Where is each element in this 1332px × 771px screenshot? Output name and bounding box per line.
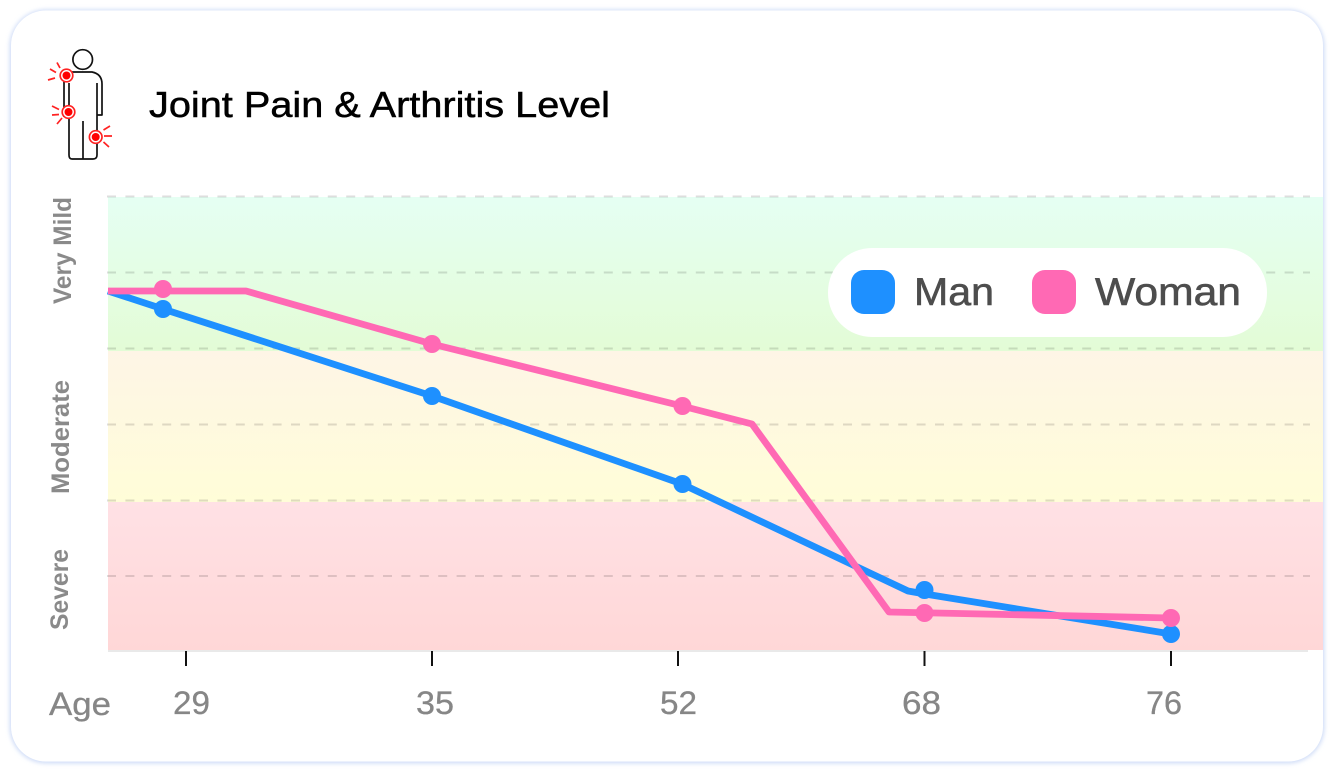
- x-axis labels: 35: [416, 685, 454, 721]
- title: Joint Pain & Arthritis Level: [149, 84, 610, 125]
- legend: man: Man: [914, 271, 994, 314]
- band: very mild: [108, 197, 1323, 351]
- x-axis labels: 68: [902, 685, 941, 721]
- x-axis labels: Age: [49, 686, 111, 722]
- x-axis labels: [49, 685, 1182, 722]
- legend: woman: [1032, 270, 1241, 314]
- x-axis labels: 76: [1146, 685, 1182, 721]
- band: moderate: [108, 351, 1323, 502]
- axis ticks: [186, 651, 1171, 666]
- y-axis label: moderate: Moderate: [47, 380, 75, 494]
- legend: woman: Woman: [1095, 271, 1241, 314]
- y-axis label: very mild: Very Mild: [49, 197, 77, 304]
- icon: body with joint pain: [48, 50, 112, 159]
- y-axis label: severe: Severe: [46, 549, 74, 630]
- line: man: [108, 291, 1180, 643]
- x-axis labels: 29: [173, 685, 210, 721]
- band: severe: [108, 502, 1323, 650]
- legend: [828, 248, 1267, 337]
- legend: man: [851, 270, 994, 314]
- line: woman: [108, 280, 1180, 627]
- chart: arthritis level by age: [46, 196, 1323, 722]
- x-axis labels: 52: [660, 685, 697, 721]
